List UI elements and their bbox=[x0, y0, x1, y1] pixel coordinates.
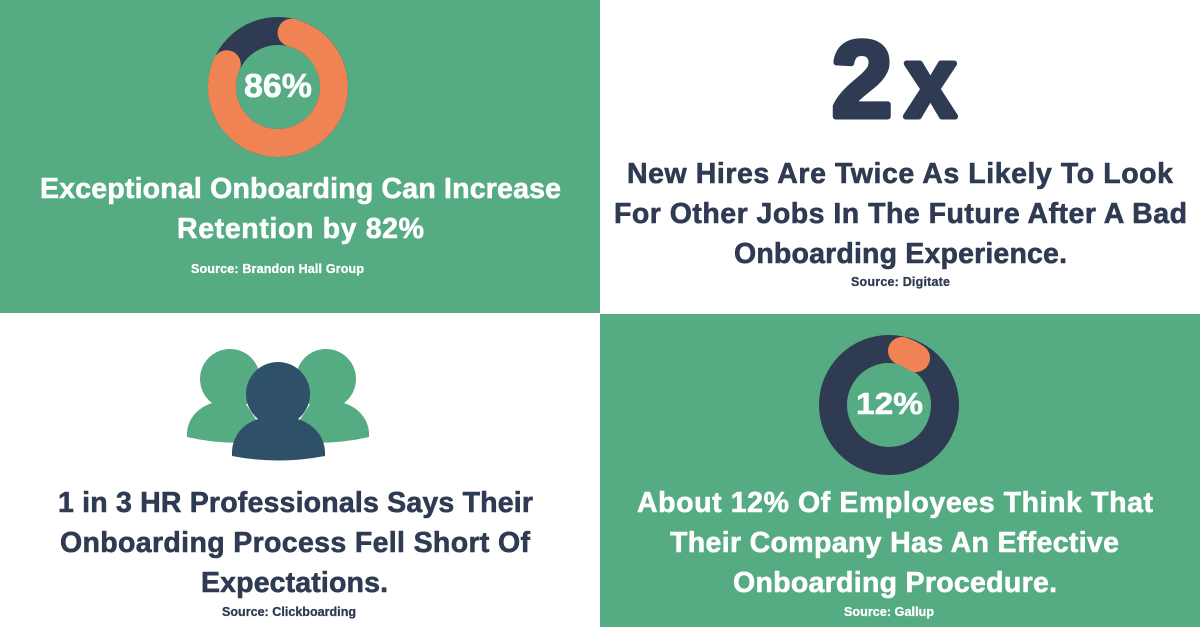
heading: retention statistic: Retention by 82% bbox=[177, 213, 424, 245]
donut chart: 12% bbox=[833, 349, 945, 461]
heading: new hires statistic: For Other Jobs In The Future After A Bad bbox=[614, 198, 1187, 230]
heading: effective procedure statistic: Their Company Has An Effective bbox=[670, 527, 1119, 559]
panel: HR professionals bbox=[0, 314, 600, 627]
panel: effective onboarding procedure bbox=[600, 314, 1200, 627]
heading: effective procedure statistic: Onboarding Procedure. bbox=[733, 567, 1057, 599]
heading: retention statistic: Exceptional Onboarding Can Increase bbox=[40, 173, 561, 205]
heading: effective procedure statistic: About 12% Of Employees Think That bbox=[637, 487, 1154, 519]
heading: new hires statistic: New Hires Are Twice As Likely To Look bbox=[627, 158, 1173, 190]
panel: exceptional onboarding retention bbox=[0, 0, 600, 313]
heading: new hires statistic: Onboarding Experience. bbox=[734, 238, 1067, 270]
heading: new hires statistic bbox=[614, 158, 1187, 270]
source: Clickboarding: Source: Clickboarding bbox=[222, 605, 356, 619]
donut chart: 12%: 12% bbox=[856, 386, 923, 421]
big number: 2x: x bbox=[905, 26, 956, 138]
big number: 2x bbox=[832, 18, 956, 140]
panel: twice as likely bbox=[600, 0, 1200, 313]
heading: HR statistic: Expectations. bbox=[201, 567, 388, 599]
heading: effective procedure statistic bbox=[637, 487, 1154, 599]
heading: HR statistic: 1 in 3 HR Professionals Says Their bbox=[58, 487, 533, 519]
big number: 2x: 2 bbox=[832, 18, 892, 140]
source: Gallup: Source: Gallup bbox=[844, 605, 934, 619]
heading: HR statistic bbox=[58, 487, 533, 599]
icon: group of people bbox=[187, 349, 369, 460]
donut chart: 86%: 86% bbox=[244, 67, 312, 104]
source: Brandon Hall Group: Source: Brandon Hall Group bbox=[191, 262, 364, 276]
heading: HR statistic: Onboarding Process Fell Short Of bbox=[60, 527, 530, 559]
donut chart: 86% bbox=[222, 31, 334, 143]
source: Digitate: Source: Digitate bbox=[851, 275, 950, 289]
heading: retention statistic bbox=[40, 173, 561, 245]
